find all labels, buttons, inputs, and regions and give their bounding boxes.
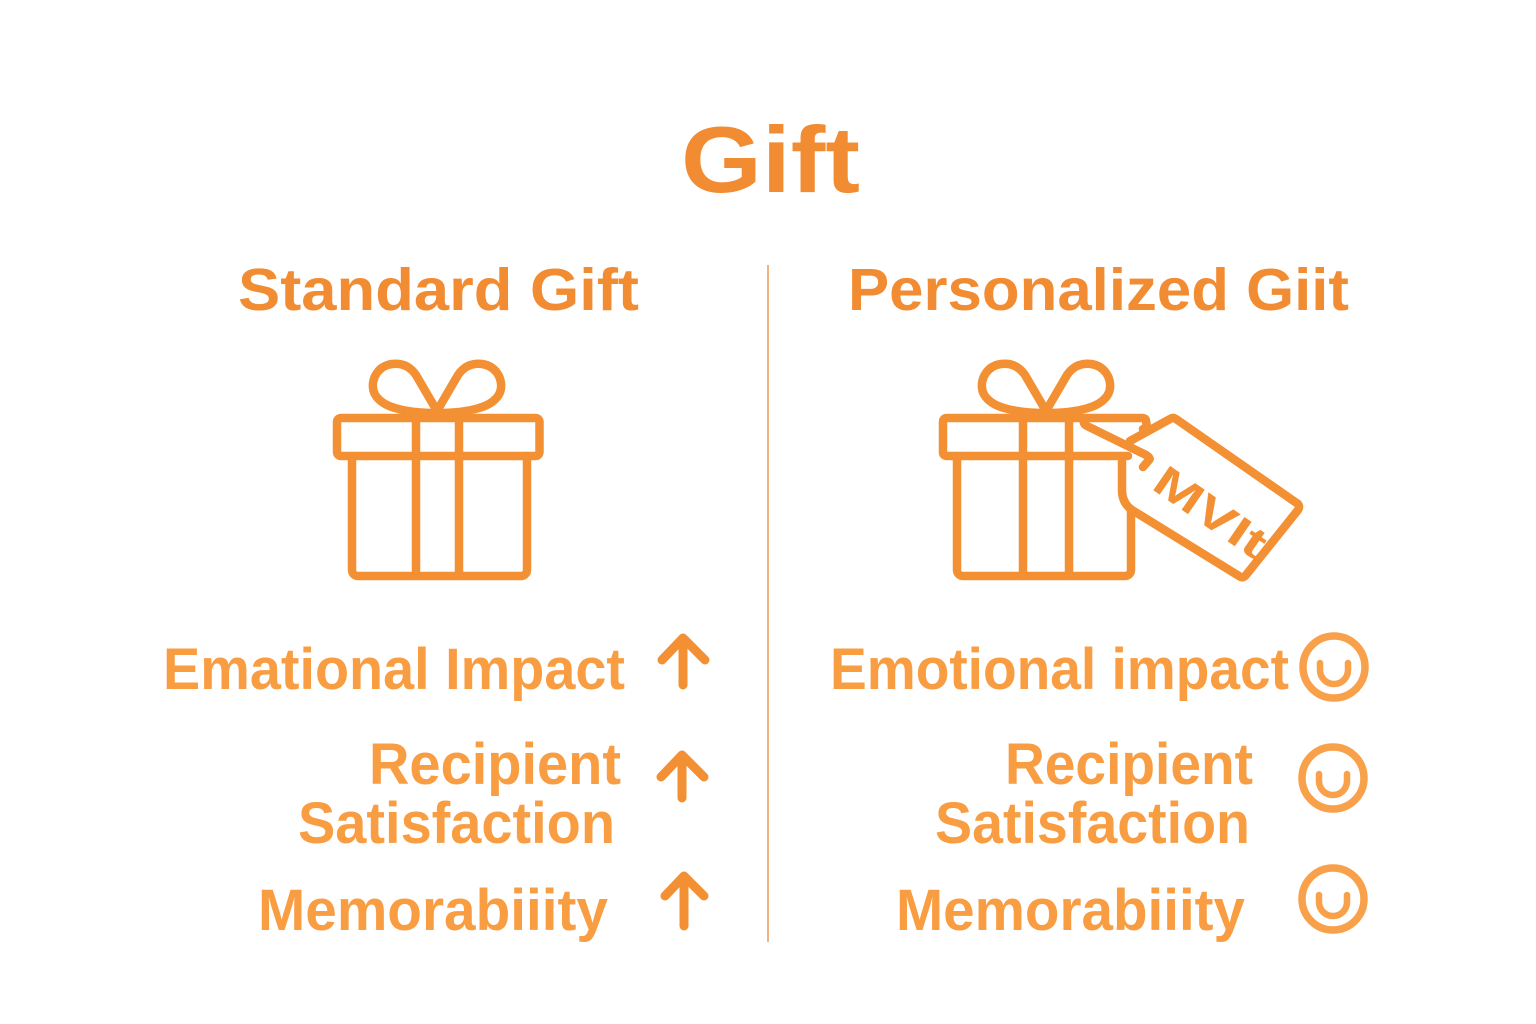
heading: personalized gift: Personalized Giit [848, 257, 1349, 323]
metric: recipient satisfaction [935, 732, 1253, 856]
metric: recipient satisfaction: Satisfaction [298, 791, 615, 856]
metric: memorability: Memorabiiity [896, 878, 1245, 943]
icon: up arrow 1 [662, 638, 705, 685]
title: Gift [681, 107, 860, 212]
metric: emotional impact: Emotional impact [830, 637, 1289, 702]
icon: gift box [337, 364, 540, 576]
panel: personalized gift [830, 257, 1365, 943]
metric: emotional impact: Emational Impact [163, 637, 625, 702]
divider between columns [767, 265, 769, 942]
icon: smiley 1 [1303, 636, 1365, 698]
tag label: MVIt [1144, 457, 1276, 568]
metric: recipient satisfaction: Recipient [1005, 732, 1253, 797]
metric: recipient satisfaction [298, 732, 621, 856]
icon: up arrow 3 [665, 876, 704, 926]
icon: gift tag [1122, 418, 1299, 577]
metric: memorability: Memorabiiity [258, 878, 608, 943]
metric: recipient satisfaction: Satisfaction [935, 791, 1250, 856]
icon: smiley 3 [1302, 868, 1364, 930]
icon: gift box with tag [943, 364, 1299, 577]
icon: smiley 2 [1302, 747, 1364, 809]
heading: standard gift: Standard Gift [238, 257, 639, 323]
panel: standard gift [163, 257, 705, 943]
icon: tag string [1084, 421, 1150, 467]
metric: recipient satisfaction: Recipient [369, 732, 621, 797]
icon: up arrow 2 [661, 755, 704, 798]
